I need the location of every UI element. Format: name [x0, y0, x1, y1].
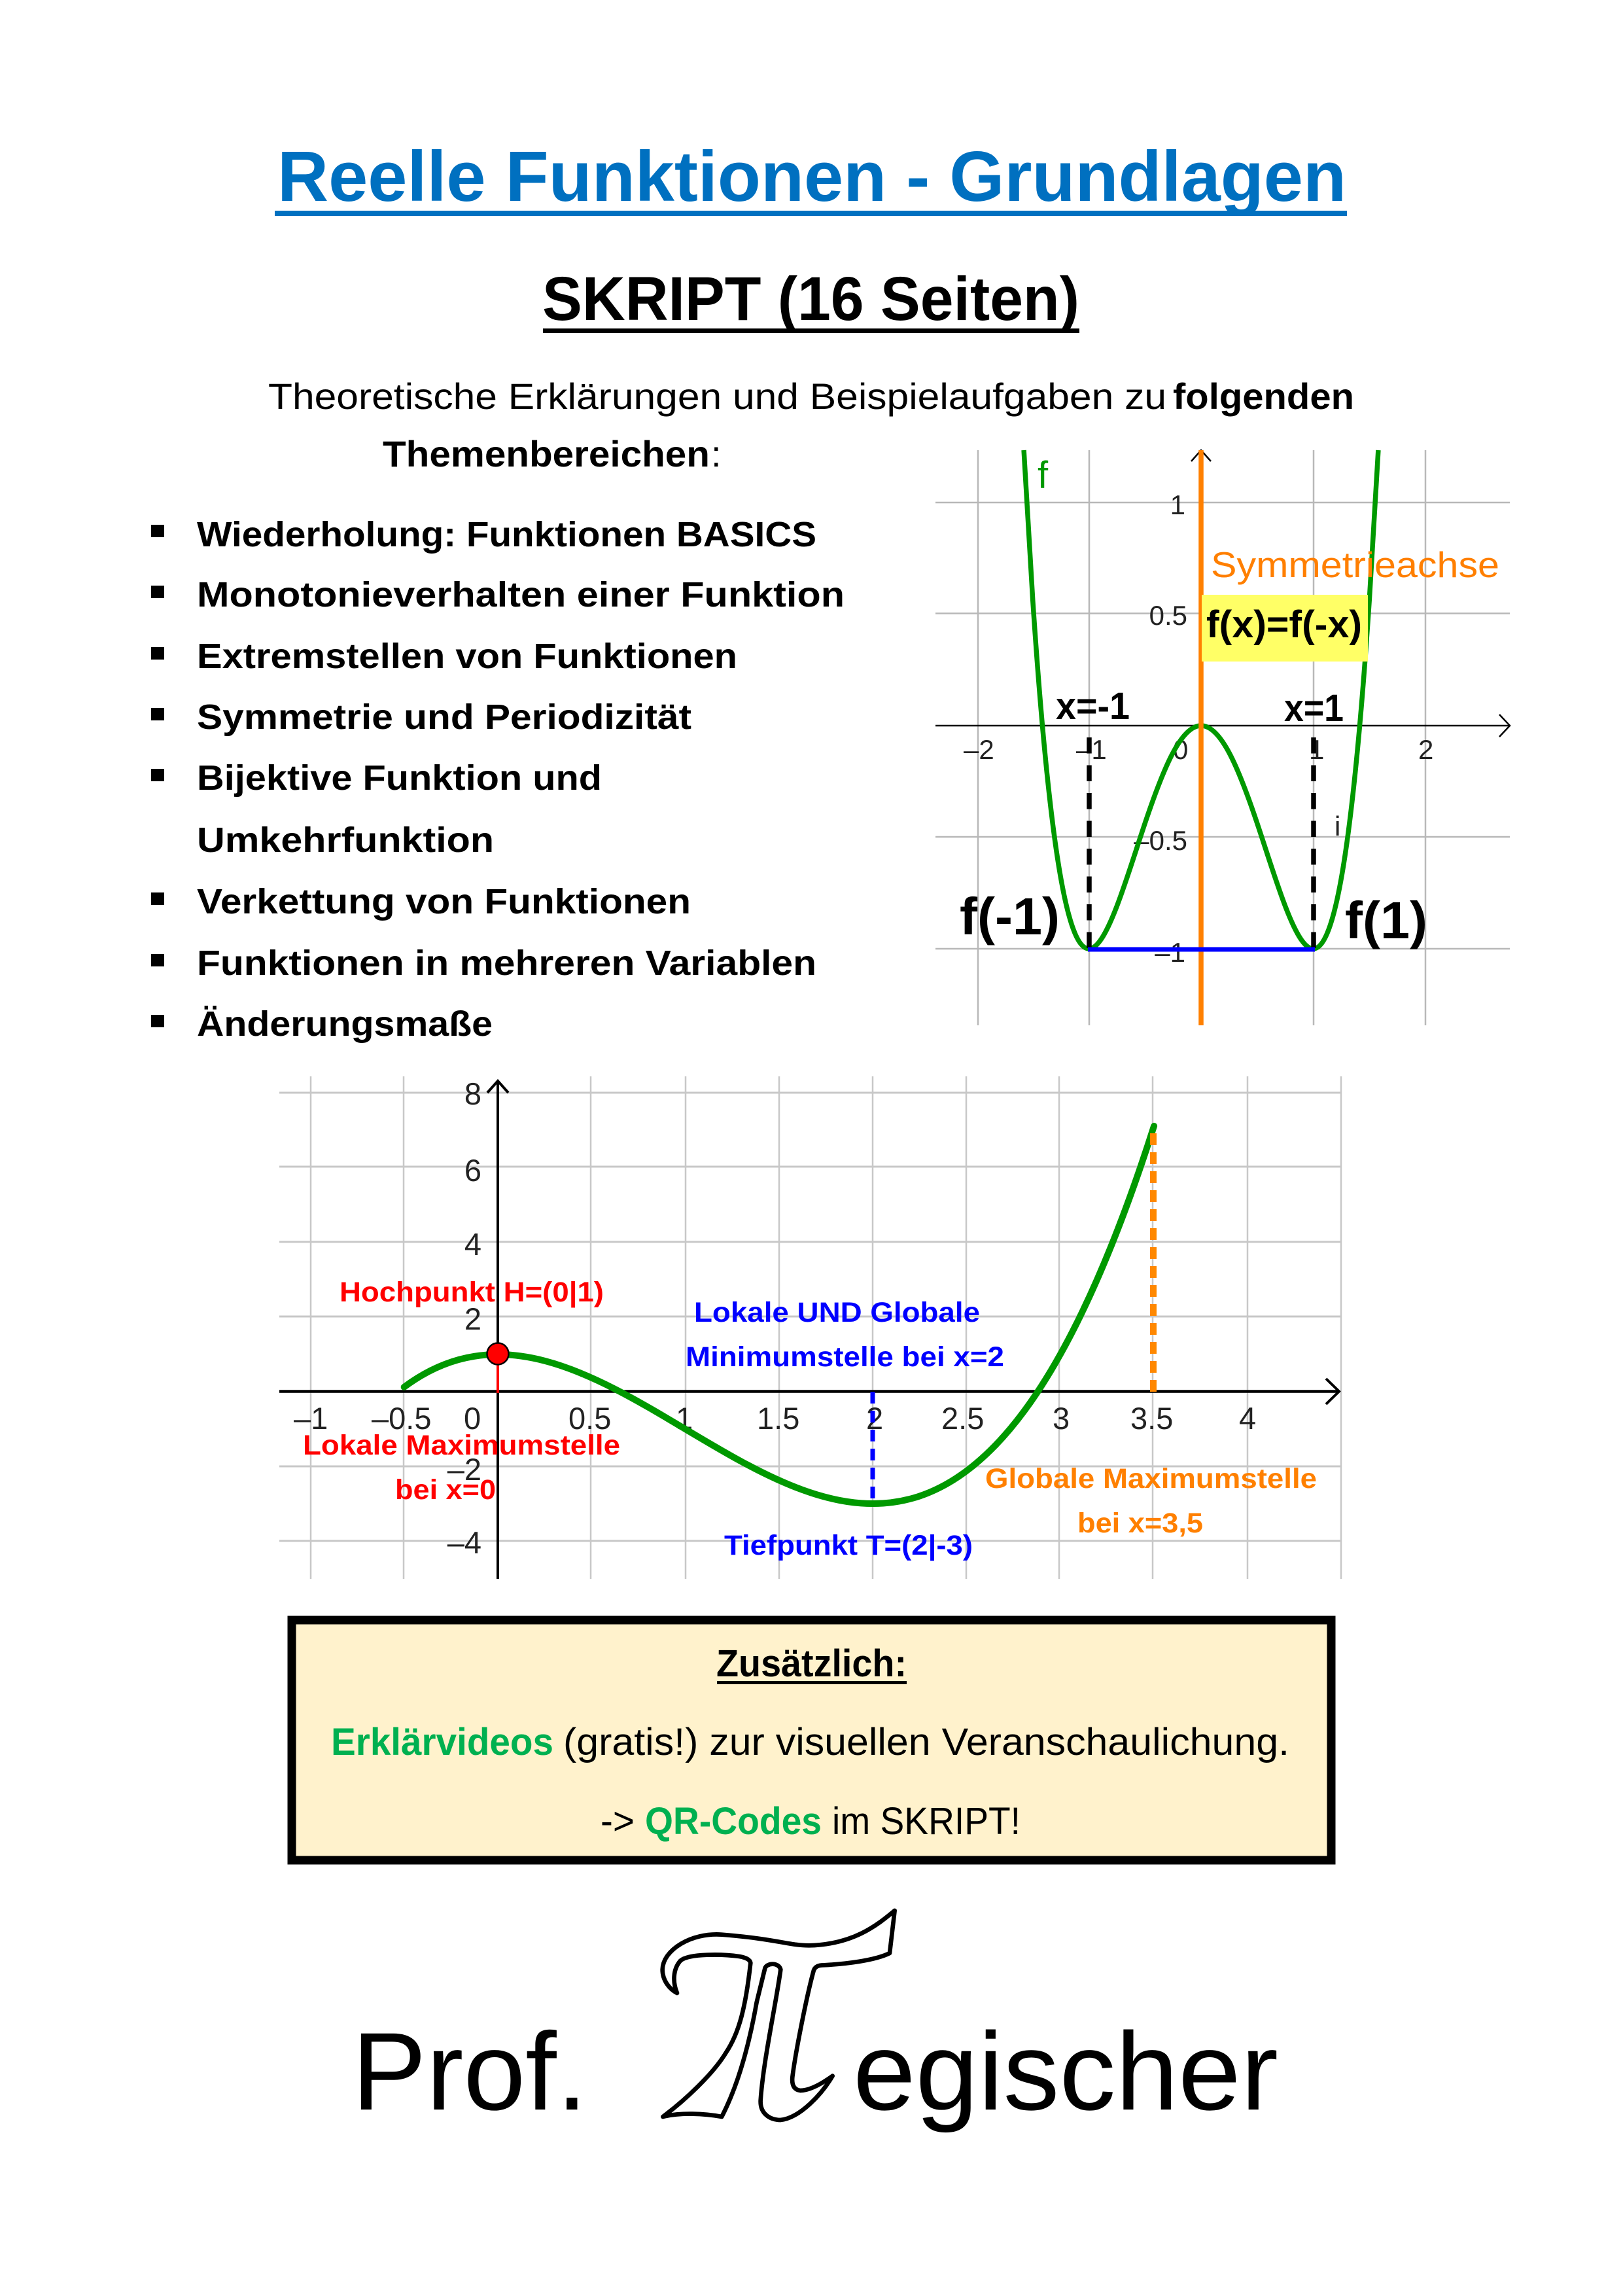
label: curve name f: f [1038, 454, 1049, 497]
chart: symmetric quartic function: 0 [1173, 734, 1188, 765]
dashed markers [1089, 737, 1314, 949]
intro text: : [711, 433, 722, 474]
chart: cubic function with extrema: –0.5 [372, 1401, 431, 1436]
callout line: QR codes: im SKRIPT! [832, 1800, 1021, 1843]
label: Symmetrieachse: Symmetrieachse [1211, 544, 1499, 585]
chart: symmetric quartic function: –0.5 [1134, 825, 1187, 856]
topic list: Monotonieverhalten einer Funktion [197, 575, 845, 614]
blue labels: Lokale UND Globale [694, 1297, 980, 1328]
chart: cubic function with extrema: 2 [866, 1401, 883, 1436]
label: symmetry equation [1202, 595, 1368, 662]
topic list: Wiederholung: Funktionen BASICS [197, 515, 816, 554]
callout line: videos: Erklärvideos [331, 1721, 553, 1763]
point labels: f(-1) [960, 887, 1060, 945]
chart: symmetric quartic function: 0.5 [1149, 600, 1187, 631]
callout line: videos: (gratis!) zur visuellen Veranschaulichung. [563, 1721, 1289, 1763]
blue connecting segment [1088, 947, 1315, 951]
topic list: Änderungsmaße [197, 1004, 493, 1044]
point labels: x=-1 [1056, 685, 1130, 728]
logo icon: stylised pi [663, 1911, 895, 2120]
chart: cubic function with extrema: 3.5 [1130, 1401, 1173, 1436]
chart: cubic function with extrema: –2 [447, 1452, 481, 1487]
chart: cubic function with extrema: 3 [1053, 1401, 1070, 1436]
topic list: Bijektive Funktion und [197, 758, 602, 798]
chart: cubic function with extrema: 6 [464, 1153, 481, 1188]
global maximum dashed line [1150, 1127, 1157, 1392]
chart: cubic function with extrema: 0 [464, 1401, 481, 1436]
curve [404, 1126, 1154, 1504]
topic list [151, 515, 845, 1044]
chart: cubic function with extrema: 4 [1239, 1401, 1256, 1436]
callout line: QR codes: QR-Codes [645, 1800, 822, 1843]
intro text: Themenbereichen [383, 433, 710, 474]
topic list: Funktionen in mehreren Variablen [197, 944, 816, 983]
blue labels [686, 1297, 1004, 1561]
point labels: f(1) [1345, 891, 1427, 949]
topic list: Symmetrie und Periodizität [197, 698, 691, 737]
callout line: QR codes [601, 1800, 1021, 1843]
red labels: bei x=0 [395, 1474, 496, 1506]
chart: symmetric quartic function: 1 [1170, 489, 1185, 520]
logo text: egischer: egischer [853, 2009, 1278, 2133]
blue labels: Minimumstelle bei x=2 [686, 1341, 1004, 1373]
intro text [268, 376, 1354, 474]
orange labels: Globale Maximumstelle [985, 1463, 1317, 1494]
subtitle: SKRIPT (16 Seiten) [542, 264, 1079, 334]
chart: cubic function with extrema: –1 [294, 1401, 328, 1436]
red labels: Hochpunkt H=(0|1) [340, 1277, 604, 1308]
red labels: Lokale Maximumstelle [303, 1430, 620, 1461]
topic list: Extremstellen von Funktionen [197, 637, 737, 676]
chart: cubic function with extrema: 1 [676, 1401, 693, 1436]
point labels: x=1 [1284, 687, 1344, 730]
logo text: Prof.: Prof. [352, 2009, 587, 2133]
chart: cubic function with extrema: 1.5 [757, 1401, 799, 1436]
callout heading: Zusätzlich: [716, 1642, 907, 1685]
topic list: Umkehrfunktion [197, 821, 494, 860]
chart: cubic function with extrema: 8 [464, 1076, 481, 1111]
chart: cubic function with extrema: –4 [447, 1525, 481, 1560]
symmetry axis line [1198, 450, 1204, 1025]
minimum dashed line [870, 1392, 875, 1504]
chart: symmetric quartic function: 1 [1309, 734, 1324, 765]
curve f [1024, 450, 1378, 949]
chart: symmetric quartic function [935, 450, 1510, 1025]
label: symmetry equation: f(x)=f(-x) [1206, 603, 1362, 646]
chart: cubic function with extrema: 4 [464, 1227, 481, 1262]
chart: cubic function with extrema: 2 [464, 1301, 481, 1336]
orange labels: bei x=3,5 [1077, 1508, 1203, 1539]
intro text: Theoretische Erklärungen und Beispielaufgaben zu [268, 376, 1166, 417]
orange labels [985, 1463, 1317, 1539]
intro text: folgenden [1173, 376, 1354, 417]
topic list: Verkettung von Funktionen [197, 882, 691, 921]
red labels [303, 1277, 620, 1506]
local maximum stem [497, 1354, 499, 1393]
chart: cubic function with extrema [279, 1076, 1341, 1579]
blue labels: Tiefpunkt T=(2|-3) [724, 1530, 973, 1561]
chart: symmetric quartic function: –2 [964, 734, 994, 765]
title: Reelle Funktionen - Grundlagen [277, 137, 1346, 217]
chart: symmetric quartic function: –1 [1155, 937, 1185, 968]
callout line: QR codes: -> [601, 1800, 635, 1843]
chart: cubic function with extrema: 2.5 [941, 1401, 984, 1436]
point labels [960, 685, 1427, 949]
chart: symmetric quartic function: 2 [1418, 734, 1433, 765]
chart: symmetric quartic function: –1 [1076, 734, 1107, 765]
logo [352, 1911, 1278, 2133]
chart: symmetric quartic function: i [1335, 811, 1340, 841]
callout box [292, 1620, 1331, 1860]
high point marker [487, 1343, 509, 1365]
chart: cubic function with extrema: 0.5 [568, 1401, 611, 1436]
